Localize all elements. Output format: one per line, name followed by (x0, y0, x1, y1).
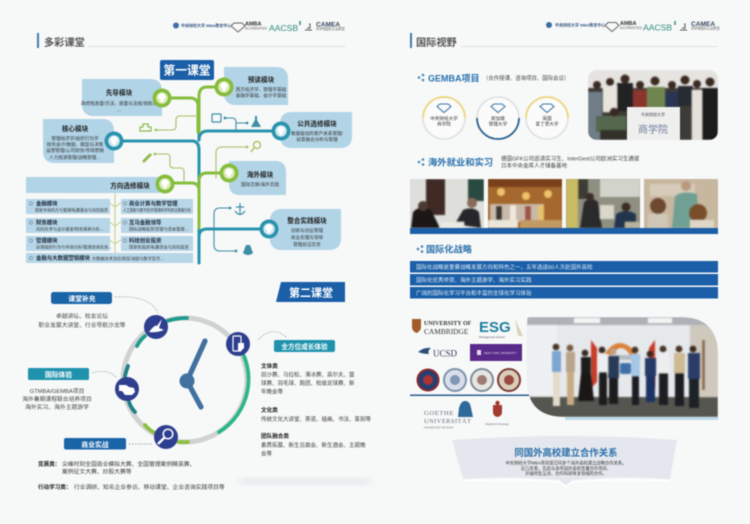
sub-module tree (108, 193, 122, 253)
label: international experience: GTMBA/GEMBA项目 (30, 388, 84, 395)
logo: NYU: NEW YORK UNIVERSITY (484, 351, 517, 355)
logo: ESG: ESG (479, 319, 511, 336)
text: activities right column: 田沙赛、马拉松、滑冰赛、高尔夫、篮 (261, 370, 355, 378)
photo: teaching (644, 179, 718, 228)
label: classroom supplement: 课堂补充 (68, 294, 96, 303)
photo: interview (410, 179, 484, 228)
banner: partner universities (452, 436, 677, 487)
overseas employment heading (418, 154, 640, 170)
right page header logos: CAMEA (691, 21, 715, 28)
module: pre-reading (224, 67, 288, 105)
module: core: 管理经济学/组织行为学 (51, 135, 99, 142)
logo: ESG (479, 319, 523, 339)
text: business practice detail: 行动学习类： (38, 483, 72, 491)
module: public electives (280, 112, 352, 148)
node: classroom supplement (144, 315, 168, 339)
banner: partner universities: 中央财经大学MBA项目现已同多个海外高校建立战略合作关系。 (505, 460, 627, 466)
overseas employment heading: 德国GFK公司巡请实习生、InterGest公司欧洲实习生遴拔 (501, 154, 640, 162)
GEMBA heading: （合作授课、咨询项目、国际会议） (483, 74, 569, 82)
right page header logos (546, 21, 720, 32)
strategy rows (410, 261, 718, 298)
text: activities right column: 团队融合类 (261, 432, 289, 440)
photo: group in hall (488, 179, 562, 228)
module: core (43, 119, 114, 163)
internationalisation heading: 国际化战略 (426, 244, 473, 254)
right page header logos: 商学院国际认证联盟 (691, 26, 720, 30)
sub-module rows: 运营组织行为与市场分析/管理咨询实务… (36, 244, 113, 250)
label: business practice (64, 438, 126, 450)
text: business practice detail: 尖峰时刻全国商业模拟大赛、全国管理案例精英赛、 (62, 460, 195, 468)
photo: classroom (566, 179, 640, 228)
sub-module rows: 大数据技术及应用/区块链与数字货币… (92, 255, 164, 262)
partner circle: Singapore Management University: 管理大学 (489, 120, 508, 128)
strategy rows: 国际化战略是重要战略发展方向和特色之一，五年选送60人次赴国外高校 (416, 263, 593, 271)
module: overseas: 海外模块 (247, 170, 274, 179)
bulb nodes (104, 78, 290, 238)
text: activities right column: 文体类 (261, 362, 278, 370)
module: foundation: 先导模块 (106, 88, 133, 97)
text: activities right column: 素质拓展、新生见面会、新生酒会、主题晚 (261, 441, 366, 449)
left page header logos: 商学院国际认证联盟 (316, 26, 345, 31)
logo: Goethe University: UNIVERSITÄT (424, 418, 472, 425)
text: activities right column: 文化类 (261, 406, 278, 414)
text: activities right column: 年晚会等 (261, 388, 284, 396)
first classroom tree (26, 60, 352, 263)
module: foundation: … (117, 107, 121, 112)
logo: UCSD: UCSD (433, 348, 458, 358)
module: core: 人力资源管理/战略管理… (49, 154, 101, 161)
text: activities right column (261, 362, 372, 458)
overseas employment heading: 日本中央金库人才储备基地 (501, 162, 568, 170)
module: pre-reading: 预读模块 (248, 75, 275, 84)
banner: partner universities: 开展师生互访、合作科研等多领域的合作。 (525, 470, 607, 477)
module: foundation: 政府性质量/方法、质量与法规/领航与 (81, 100, 157, 107)
label: all-round growth: 全方位成长体验 (281, 342, 328, 351)
sub-module rows: 风险技术与会计基准/财务报表分析… (36, 226, 104, 232)
sub-module rows: 商业计算与数字管理 (129, 200, 178, 208)
module: public electives: 公共选修模块 (297, 119, 337, 128)
partner circle: CUFE business school (423, 97, 465, 139)
text: business practice detail: 竞赛类： (38, 460, 60, 468)
label: all-round growth (274, 340, 335, 352)
text: activities right column: 球赛、羽毛球、跑团、校级足球赛、新 (261, 379, 355, 387)
module: direction electives: 方向选修模块 (110, 181, 150, 190)
GEMBA heading (418, 74, 569, 84)
GEMBA heading: GEMBA项目 (428, 74, 480, 84)
small icons (140, 114, 261, 255)
left page header logos: AACSB (269, 23, 298, 33)
strategy rows: 国际化优秀师资、海外主题游学、海外实习实践 (416, 276, 532, 284)
module: direction electives (26, 177, 193, 263)
left page header logos: CAMEA (316, 22, 340, 28)
module: core: 核心模块 (62, 124, 89, 133)
sub-module rows: 国际战略投资/资管与资本管理… (129, 226, 189, 232)
right page header logos: 中央财经大学 MBA教育中心 (555, 22, 605, 28)
module: public electives: 数据驱动的客户关系管理/ (291, 130, 344, 137)
overseas employment heading: 海外就业和实习 (428, 156, 493, 168)
logo: Goethe University: FRANKFURT AM MAIN (424, 426, 453, 430)
tree trunk and branches (114, 87, 280, 263)
module: public electives: 前景融合分析与管理 (296, 136, 338, 143)
partner circle: Singapore Management University (477, 97, 519, 139)
photo: group with school banner: 商学院 (638, 123, 668, 136)
left page header logos: 中央财经大学 MBA教育中心 (181, 22, 231, 28)
right page heading: 国际视野 (416, 36, 457, 49)
university seals (418, 369, 520, 391)
label: classroom supplement: 卓越讲坛、校友论坛 (56, 312, 108, 320)
partner circle: CUFE business school: 中央财经大学 (430, 115, 458, 122)
left page header logos: ACCREDITED (245, 26, 268, 30)
photo: signing ceremony group (527, 317, 718, 420)
right page header logos: AMBA (620, 21, 637, 27)
blue bar under photos (410, 228, 718, 234)
right page header logos: ACCREDITED (620, 26, 643, 30)
logo: ESG: Management School (479, 335, 505, 339)
module: pre-reading: 金融学基础、会计学基础 (236, 92, 287, 99)
sub-module rows: 管理模块 (36, 236, 58, 244)
logo: Cambridge (412, 319, 472, 336)
module: integrated practice (270, 209, 341, 250)
text: business practice detail (38, 460, 225, 491)
text: business practice detail: 案例征文大赛、炒股大赛等 (62, 468, 132, 476)
logo: Cambridge: CAMBRIDGE (424, 327, 469, 336)
label: business practice: 商业实战 (81, 440, 109, 449)
node: business practice (154, 425, 178, 449)
left page header logos: AMBA (245, 22, 262, 28)
node: international experience (115, 377, 139, 401)
label: international experience: 国际体验 (45, 370, 72, 379)
module: overseas: 国际交换/海外实践 (241, 181, 279, 188)
partner logos (410, 319, 532, 430)
partner circle: UK university: 英国 (542, 115, 552, 122)
module: integrated practice: 整合实践模块 (287, 216, 327, 225)
first classroom title: 第一课堂 (163, 64, 211, 78)
text: activities right column: 传统文化大讲堂、茶道、插画、书法、篆刻等 (261, 415, 372, 423)
banner: partner universities: 近几年来，先后与多所国外高校签署合作项目、 (521, 465, 611, 472)
left page heading: 多彩课堂 (44, 36, 85, 49)
partner circle: CUFE business school: 商学院 (437, 120, 451, 128)
first classroom title (160, 60, 214, 80)
dotted arrows (92, 297, 286, 444)
module: foundation (81, 79, 162, 116)
module: integrated practice: 创新与创业管理 (291, 227, 323, 234)
logo: Cambridge: UNIVERSITY OF (424, 321, 472, 327)
sub-module rows: 科技创业投资 (129, 236, 162, 244)
module: core: 财务会计/数据、模型与决策 (47, 141, 104, 148)
node: all-round growth (226, 332, 250, 356)
banner: partner universities: 同国外高校建立合作关系 (514, 447, 618, 458)
label: international experience (22, 368, 92, 411)
sub-module rows: 互马金融领导 (129, 218, 162, 226)
second classroom title (276, 282, 345, 302)
label: classroom supplement: 职业发展大讲堂、行业导航沙龙等 (39, 321, 126, 329)
sub-module rows: 人工智能与数字经济/管理科学的前沿数据分析 (123, 206, 191, 214)
logo: Goethe University (424, 401, 473, 430)
logo: crest: Stanford University (485, 422, 509, 426)
module: integrated practice: 管理前沿实务 (293, 241, 321, 248)
label: international experience: 海外实习、海外主题游学 (25, 403, 89, 411)
sub-module rows: 国家性投资/私募资金与风险投资 (129, 244, 189, 250)
sub-module rows: 国家市场的方与管理/私募基金与风险投资 (35, 206, 108, 214)
partner circle: Singapore Management University: 新加坡 (491, 115, 505, 122)
sub-module rows: 财务模块 (36, 218, 58, 226)
strategy rows: 广阔的国际化学习平台和丰富的全球化学习体验 (416, 289, 532, 297)
label: international experience: 海外暑期课程联合培养项目 (22, 395, 92, 403)
clock hands (180, 341, 205, 407)
text: business practice detail: 行业调研、知名企业参访、移动课堂、企业咨询实践项目等 (74, 483, 225, 491)
logo: Goethe University: GOETHE (424, 410, 454, 417)
photo: group with school banner (588, 70, 718, 140)
sub-module rows: 金融模块 (36, 200, 58, 208)
sub-module rows: 金融与大数据营销模块 (36, 254, 91, 262)
module: integrated practice: 商业伦理与领导 (291, 234, 323, 241)
clock ring diagram (115, 315, 250, 449)
partner circle: UK university: 爱丁堡大学 (536, 120, 559, 128)
sub-module rows (26, 199, 193, 263)
module: core: 运营管理/公司财务/市场营销 (46, 147, 104, 154)
left page header logos (173, 21, 345, 33)
right page header logos: AACSB (643, 22, 672, 32)
label: classroom supplement (39, 292, 126, 329)
text: activities right column: 会等 (261, 450, 273, 458)
module: pre-reading: 西方经济学、管理学基础 (236, 86, 287, 93)
partner circle: UK university (526, 97, 568, 139)
photo: group with school banner: 中央财经大学 (641, 111, 665, 117)
module: overseas (229, 161, 286, 195)
second classroom title: 第二课堂 (289, 286, 333, 300)
